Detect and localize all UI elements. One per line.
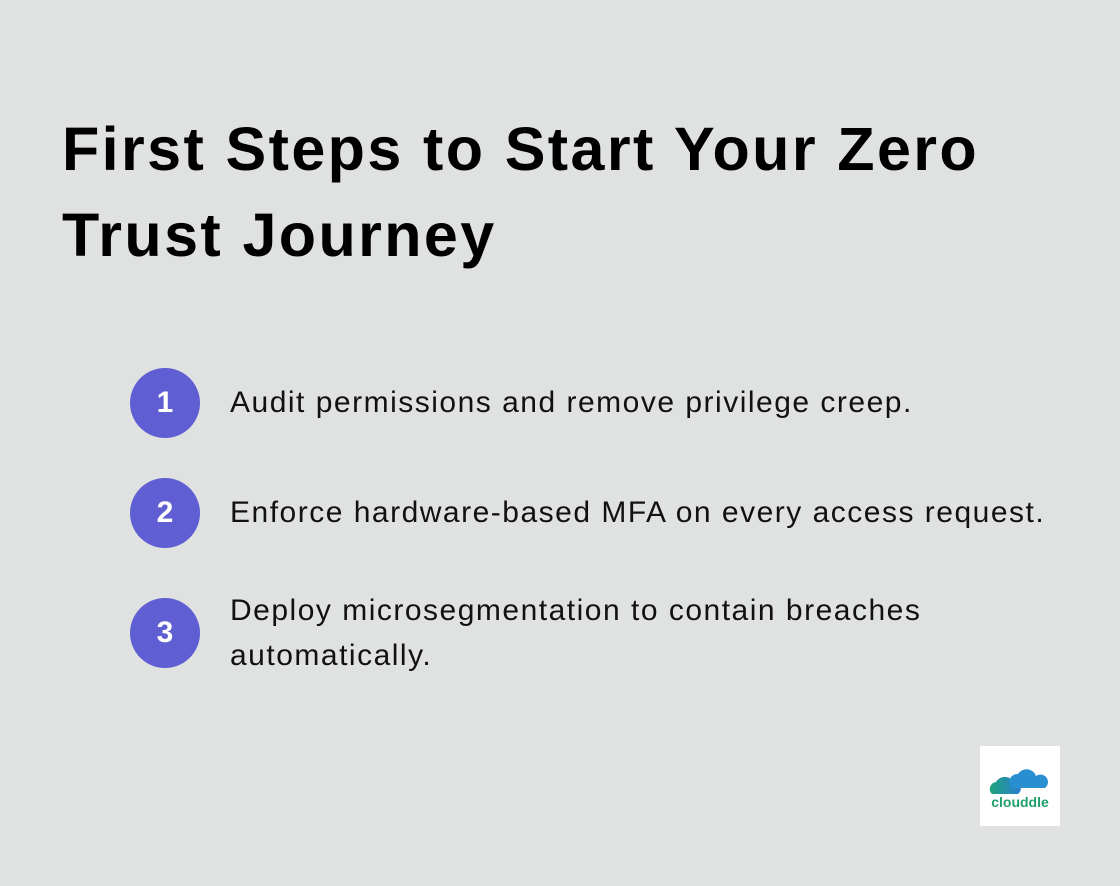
number 3 [130, 598, 200, 668]
step 2 [130, 478, 1045, 548]
text 3: automatically. [230, 639, 432, 672]
step 1 [130, 368, 913, 438]
number 2: 2 [157, 496, 173, 529]
icon: clouds [990, 769, 1048, 794]
text 2: Enforce hardware-based MFA on every access request. [230, 496, 1045, 529]
number 3: 3 [157, 616, 173, 649]
number 1 [130, 368, 200, 438]
title: First Steps to Start Your Zero [62, 115, 979, 183]
text 3 [230, 594, 921, 672]
brand name: clouddle [991, 794, 1049, 810]
number 2 [130, 478, 200, 548]
title [62, 115, 979, 269]
logo [980, 746, 1060, 826]
text 1: Audit permissions and remove privilege creep. [230, 386, 913, 419]
text 3: Deploy microsegmentation to contain breaches [230, 594, 921, 627]
title: Trust Journey [62, 201, 497, 269]
step 3 [130, 594, 921, 672]
number 1: 1 [157, 386, 173, 419]
